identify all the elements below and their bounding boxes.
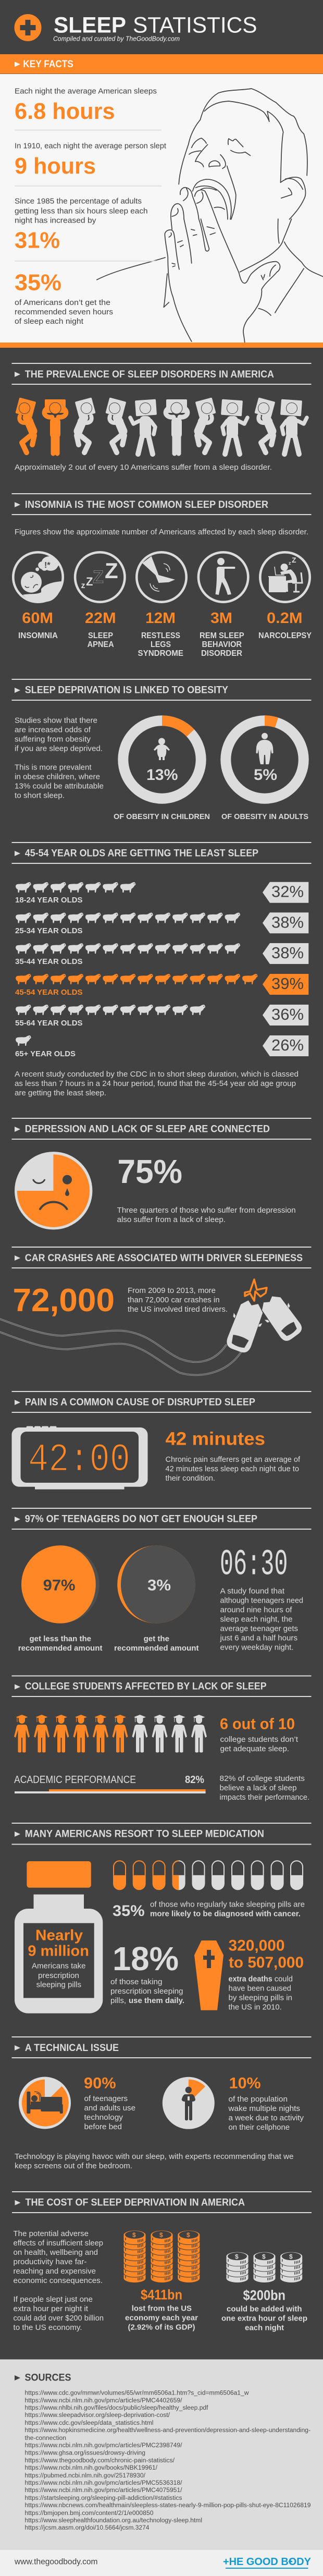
stat: restless legs bbox=[138, 610, 183, 658]
text: technology note bbox=[15, 2152, 294, 2170]
icon row: ten pills bbox=[113, 1860, 303, 1890]
stat: 31 percent bbox=[15, 197, 148, 253]
stat: average American sleep bbox=[15, 87, 157, 124]
list of source URLs bbox=[25, 2390, 310, 2531]
stat: 35 percent: recommended seven hours bbox=[15, 308, 113, 316]
stat: insomnia: INSOMNIA bbox=[18, 631, 58, 640]
icon: coffin bbox=[194, 1940, 223, 2010]
stat: 42 minutes: 42 minutes bbox=[166, 1429, 265, 1449]
row: 35-44: 38% bbox=[271, 944, 304, 962]
heading: A TECHNICAL ISSUE bbox=[25, 2043, 119, 2054]
row: 18-24 bbox=[15, 882, 308, 905]
stat: 90 percent: 90% bbox=[84, 2075, 116, 2092]
list of source URLs: https://www.ncbi.nlm.nih.gov/pmc/articles/PMC5536318/ bbox=[25, 2480, 182, 2486]
icon: pill bottle: prescription bbox=[38, 1971, 79, 1980]
row: 25-34 bbox=[15, 912, 308, 935]
heading: CAR CRASHES ARE ASSOCIATED WITH DRIVER SLEEPINESS bbox=[25, 1253, 303, 1264]
pie: 97 percent: get less than the bbox=[29, 1634, 91, 1643]
donut chart: obesity in adults bbox=[221, 721, 308, 821]
list of source URLs: https://www.ghsa.org/issues/drowsy-driving bbox=[25, 2450, 145, 2456]
row: 25-34: 38% bbox=[271, 913, 304, 931]
panel: key facts bbox=[0, 54, 323, 343]
subtitle: Compiled and curated by TheGoodBody.com bbox=[53, 34, 180, 43]
stat: 31 percent: 31% bbox=[15, 227, 60, 253]
bar chart: academic performance: 82% bbox=[185, 1774, 204, 1786]
heading bbox=[11, 1508, 312, 1530]
pie: 3 percent: recommended amount bbox=[114, 1644, 199, 1653]
list of source URLs: https://www.ncbi.nlm.nih.gov/books/NBK19961/ bbox=[25, 2465, 158, 2471]
text: teen study: every weekday night. bbox=[220, 1643, 294, 1652]
text: pain explanation: their condition. bbox=[166, 1474, 215, 1483]
panel: teenagers bbox=[11, 1508, 312, 1653]
text: 2 of 10: Approximately 2 out of every 10 Americans suffer from a sleep disorder. bbox=[15, 463, 272, 472]
panel: car crashes bbox=[0, 1247, 312, 1375]
stat: 18 percent bbox=[110, 1940, 184, 2005]
icon: orange coin stacks: $ bbox=[187, 2231, 190, 2239]
row: 35-44: 35-44 YEAR OLDS bbox=[15, 957, 82, 966]
text: teen study: although teenagers need bbox=[220, 1596, 303, 1605]
stat: sleep apnea: APNEA bbox=[88, 640, 114, 649]
stat: $411bn: $411bn bbox=[141, 2287, 182, 2303]
stat: 35 percent: 35% bbox=[15, 270, 61, 296]
text: crash explanation: From 2009 to 2013, more bbox=[128, 1286, 216, 1295]
stat: average American sleep: Each night the average American sleeps bbox=[15, 87, 157, 95]
footer bbox=[0, 2550, 323, 2576]
stat: 10 percent: 10% bbox=[229, 2075, 261, 2092]
heading bbox=[11, 1391, 312, 1413]
stat: narcolepsy bbox=[258, 610, 312, 640]
stat: 90 percent bbox=[84, 2075, 135, 2131]
text: performance note: believe a lack of sleep bbox=[220, 1784, 297, 1792]
title bbox=[54, 13, 257, 38]
stat: 18 percent: prescription sleeping bbox=[110, 1987, 183, 1996]
text: obesity explanation: to short sleep. bbox=[15, 791, 65, 800]
text: pain explanation bbox=[166, 1455, 301, 1483]
stat: $200bn: one extra hour of sleep bbox=[221, 2314, 307, 2323]
icon: sleep apnea: Z bbox=[86, 575, 93, 588]
list of source URLs: https://www.ncbi.nlm.nih.gov/pmc/articles/PMC2398749/ bbox=[25, 2443, 182, 2449]
heading: SLEEP DEPRIVATION IS LINKED TO OBESITY bbox=[25, 685, 228, 695]
text: technology note: keep screens out of the bedroom. bbox=[15, 2162, 132, 2170]
icon: grey coin stacks bbox=[226, 2252, 303, 2282]
stat: extra deaths: could bbox=[275, 1975, 293, 1984]
heading bbox=[11, 493, 312, 515]
panel: insomnia bbox=[11, 493, 312, 658]
stat: $200bn: $200bn bbox=[243, 2288, 285, 2303]
text: obesity explanation: suffering from obesity bbox=[15, 735, 91, 744]
stat: extra deaths: to 507,000 bbox=[229, 1954, 304, 1971]
stat: 18 percent: of those taking bbox=[110, 1977, 163, 1986]
heading: sources: SOURCES bbox=[25, 2373, 71, 2384]
stat: 35 percent: of sleep each night bbox=[15, 317, 84, 326]
icon: sleep apnea bbox=[75, 552, 125, 602]
text: obesity explanation: in obese children, where bbox=[15, 773, 100, 782]
stat: average American sleep: 6.8 hours bbox=[15, 99, 115, 124]
text: performance note: impacts their performance. bbox=[220, 1793, 309, 1802]
stat: sleep apnea bbox=[85, 610, 116, 649]
stat: REM sleep behavior: DISORDER bbox=[201, 649, 242, 658]
icon: sad face pie bbox=[15, 1152, 92, 1229]
text: cost explanation: productivity have far- bbox=[14, 2257, 86, 2266]
text: teen study bbox=[219, 1587, 303, 1652]
stat: 31 percent: night has increased by bbox=[15, 216, 96, 225]
heading: THE COST OF SLEEP DEPRIVATION IN AMERICA bbox=[25, 2197, 245, 2208]
icon: narcolepsy bbox=[260, 552, 310, 602]
donut chart: obesity in adults: OF OBESITY IN ADULTS bbox=[221, 812, 308, 821]
stat: 35 percent cancer bbox=[113, 1900, 305, 1920]
donut chart: obesity in children: 13% bbox=[146, 766, 178, 784]
heading bbox=[11, 842, 312, 864]
text: pain explanation: Chronic pain sufferers get an average of bbox=[166, 1455, 301, 1464]
text: adequate sleep: get adequate sleep. bbox=[220, 1744, 289, 1753]
stat: $411bn bbox=[125, 2287, 198, 2332]
icon: adult bbox=[256, 733, 273, 764]
panel: depression bbox=[11, 1118, 312, 1229]
stat: 90 percent: technology bbox=[84, 2113, 123, 2122]
list of source URLs: https://bmjopen.bmj.com/content/2/1/e000850 bbox=[25, 2510, 153, 2517]
stat: narcolepsy: 0.2M bbox=[267, 610, 302, 627]
stat: sleep apnea: 22M bbox=[85, 610, 116, 627]
text: obesity explanation: are increased odds of bbox=[15, 726, 91, 735]
list of source URLs: https://www.ncbi.nlm.nih.gov/pmc/articles/PMC4402659/ bbox=[25, 2398, 182, 2404]
heading: PAIN IS A COMMON CAUSE OF DISRUPTED SLEEP bbox=[25, 1397, 255, 1408]
pie: 3 percent: get the bbox=[144, 1634, 169, 1643]
row: 65+: 65+ YEAR OLDS bbox=[15, 1049, 76, 1058]
heading bbox=[11, 1823, 312, 1845]
heading: COLLEGE STUDENTS AFFECTED BY LACK OF SLEEP bbox=[25, 1681, 267, 1692]
heading: THE PREVALENCE OF SLEEP DISORDERS IN AMERICA bbox=[25, 369, 274, 380]
stat: extra deaths: by sleeping pills in bbox=[228, 1994, 292, 2003]
text: depression explanation bbox=[117, 1206, 296, 1224]
header bbox=[15, 13, 257, 43]
icon: pill bottle: Nearly bbox=[35, 1927, 83, 1944]
text: teen study: around nine hours of bbox=[220, 1606, 292, 1615]
row: 45-54 highlighted bbox=[15, 974, 308, 997]
icon: narcolepsy: z bbox=[289, 560, 291, 566]
list of source URLs: https://www.hopkinsmedicine.org/health/wellness-and-prevention/depression-and-sleep-understanding- bbox=[25, 2427, 310, 2434]
stat: $200bn: could be added with bbox=[227, 2305, 302, 2314]
text: cost explanation: extra hour per night it bbox=[14, 2304, 89, 2313]
logo: plus in circle bbox=[15, 14, 42, 41]
text: cost explanation: The potential adverse bbox=[14, 2229, 89, 2238]
text: pain explanation: 42 minutes less sleep each night due to bbox=[166, 1464, 299, 1473]
row: 45-54 highlighted: 45-54 YEAR OLDS bbox=[15, 988, 82, 997]
title: STATISTICS bbox=[133, 13, 257, 38]
text: CDC study: are getting the least sleep. bbox=[15, 1089, 106, 1097]
stat: narcolepsy: NARCOLEPSY bbox=[258, 631, 312, 640]
icon: orange coin stacks bbox=[123, 2230, 200, 2282]
icon: sleep apnea: z bbox=[81, 581, 85, 590]
heading: 45-54 YEAR OLDS ARE GETTING THE LEAST SLEEP bbox=[25, 848, 258, 859]
stat: 72,000: 72,000 bbox=[13, 1283, 115, 1318]
bar chart: academic performance: ACADEMIC PERFORMANCE bbox=[14, 1774, 136, 1786]
panel: sleep medication bbox=[11, 1823, 312, 2013]
text: obesity explanation bbox=[15, 716, 104, 800]
panel: sources bbox=[0, 2359, 323, 2550]
heading bbox=[11, 363, 312, 385]
row: 55-64: 36% bbox=[271, 1005, 304, 1023]
icon: REM sleep behavior bbox=[198, 552, 248, 602]
pie: 3 percent: 3% bbox=[147, 1577, 171, 1594]
pie: 97 percent: 97% bbox=[43, 1577, 76, 1594]
stat: $411bn: (2.92% of its GDP) bbox=[128, 2323, 195, 2332]
text: teen study: just 6 and a half hours bbox=[219, 1634, 297, 1643]
stat: 1910 sleep bbox=[15, 142, 167, 179]
stat: extra deaths: 320,000 bbox=[228, 1937, 284, 1955]
icon: insomnia bbox=[13, 552, 63, 602]
stat: 10 percent: of the population bbox=[228, 2095, 288, 2104]
logo: The Good Body: +HE GOOD BODY bbox=[223, 2556, 312, 2568]
stat: 18 percent: pills, bbox=[110, 1996, 126, 2005]
text: obesity explanation: if you are sleep deprived. bbox=[15, 744, 103, 753]
text: cost explanation: to the US economy. bbox=[14, 2323, 82, 2332]
stat: extra deaths: extra deaths bbox=[228, 1975, 272, 1984]
row: 65+ bbox=[15, 1035, 308, 1058]
text: CDC study bbox=[15, 1070, 299, 1097]
list of source URLs: https://www.cdc.gov/sleep/data_statistics.html bbox=[25, 2420, 153, 2426]
stat: 35 percent cancer: 35% bbox=[113, 1902, 145, 1920]
icon: orange coin stacks: $ bbox=[132, 2231, 136, 2239]
stat: 75 percent: 75% bbox=[117, 1153, 182, 1190]
heading bbox=[12, 2191, 312, 2213]
heading: MANY AMERICANS RESORT TO SLEEP MEDICATION bbox=[25, 1828, 264, 1839]
icon: yawning man line drawing bbox=[97, 89, 323, 343]
text: depression explanation: Three quarters of those who suffer from depression bbox=[117, 1206, 296, 1215]
icon row: ten students bbox=[14, 1715, 207, 1753]
icon: sleep apnea: Z bbox=[105, 558, 118, 583]
panel: cost of sleep deprivation bbox=[12, 2191, 312, 2333]
stat: $411bn: lost from the US bbox=[132, 2304, 192, 2313]
pie: 3 percent bbox=[114, 1545, 199, 1653]
text: obesity explanation: 13% could be attributable bbox=[15, 782, 104, 791]
row: 45-54 highlighted: 39% bbox=[271, 974, 304, 993]
icon: sleep apnea: Z bbox=[93, 567, 104, 587]
icon: tire tracks bbox=[0, 1319, 241, 1375]
pie: 97 percent bbox=[18, 1545, 102, 1653]
stat: REM sleep behavior bbox=[200, 610, 244, 658]
text: teen study: A study found that bbox=[220, 1587, 285, 1596]
row: 18-24: 18-24 YEAR OLDS bbox=[15, 896, 82, 905]
text: cost explanation: reaching and expensive bbox=[14, 2267, 96, 2276]
heading: key facts bbox=[0, 54, 323, 74]
list of source URLs: https://jcsm.aasm.org/doi/10.5664/jcsm.3274 bbox=[25, 2525, 150, 2531]
icon: pill bottle: Americans take bbox=[32, 1962, 85, 1971]
list of source URLs: https://www.sleepadvisor.org/sleep-deprivation-cost/ bbox=[25, 2412, 170, 2419]
heading bbox=[11, 679, 312, 701]
stat: REM sleep behavior: BEHAVIOR bbox=[202, 640, 242, 649]
icon: pill bottle: sleeping pills bbox=[36, 1981, 81, 1989]
text: technology note: Technology is playing havoc with our sleep, with experts recommending that we bbox=[15, 2152, 294, 2161]
stat: restless legs: LEGS bbox=[151, 640, 171, 649]
heading: key facts: KEY FACTS bbox=[23, 59, 73, 70]
footer URL: www.thegoodbody.com bbox=[14, 2557, 98, 2566]
text: cost explanation: effects of insufficient sleep bbox=[14, 2239, 103, 2248]
stat: restless legs: SYNDROME bbox=[138, 649, 183, 658]
stat: 31 percent: Since 1985 the percentage of adults bbox=[15, 197, 142, 206]
text: cost explanation bbox=[14, 2229, 104, 2332]
list of source URLs: https://www.thegoodbody.com/chronic-pain-statistics/ bbox=[25, 2458, 175, 2464]
stat: 35 percent cancer: of those who regularly take sleeping pills are bbox=[150, 1900, 305, 1909]
stat: $200bn bbox=[221, 2288, 307, 2333]
stat: $411bn: economy each year bbox=[125, 2314, 198, 2323]
stat: 35 percent: of Americans don’t get the bbox=[15, 298, 110, 307]
title: SLEEP bbox=[54, 13, 126, 38]
panel: college students bbox=[11, 1676, 312, 1802]
text: adequate sleep bbox=[220, 1735, 299, 1753]
icon: insomnia: !* bbox=[44, 561, 51, 570]
list of source URLs: https://www.nhlbi.nih.gov/files/docs/public/sleep/healthy_sleep.pdf bbox=[25, 2405, 208, 2411]
donut chart: obesity in children bbox=[114, 721, 210, 821]
bar chart: academic performance bbox=[14, 1774, 206, 1793]
stat: 90 percent: of teenagers bbox=[84, 2094, 128, 2103]
icon: child bbox=[154, 738, 170, 760]
panel: pain bbox=[11, 1391, 312, 1490]
stat: 1910 sleep: In 1910, each night the average person slept bbox=[15, 142, 167, 150]
stat: 10 percent bbox=[228, 2075, 304, 2132]
stat: restless legs: RESTLESS bbox=[141, 631, 180, 640]
stat: 18 percent: 18% bbox=[113, 1940, 179, 1977]
stat: 1910 sleep: 9 hours bbox=[15, 153, 96, 179]
text: crash explanation bbox=[128, 1286, 228, 1314]
row: 55-64: 55-64 YEAR OLDS bbox=[15, 1019, 82, 1028]
stat: 6 out of 10: 6 out of 10 bbox=[220, 1716, 295, 1733]
text: crash explanation: the US involved tired drivers. bbox=[128, 1305, 228, 1314]
stat: 18 percent: use them daily. bbox=[129, 1996, 184, 2005]
icon: alarm clock bbox=[11, 1426, 148, 1490]
stat: REM sleep behavior: REM SLEEP bbox=[200, 631, 244, 640]
panel: prevalence of sleep disorders bbox=[11, 363, 312, 472]
icon: narcolepsy: Z bbox=[292, 556, 296, 564]
stat: extra deaths bbox=[228, 1937, 304, 2012]
icon: crash burst bbox=[245, 1279, 267, 1301]
row: 18-24: 32% bbox=[271, 883, 304, 901]
panel: obesity bbox=[11, 679, 312, 821]
text: performance note bbox=[220, 1774, 309, 1802]
stat: REM sleep behavior: 3M bbox=[210, 610, 232, 627]
stat: 10 percent: on their cellphone bbox=[228, 2123, 290, 2132]
text: cost explanation: economic consequences. bbox=[14, 2276, 103, 2285]
donut chart: obesity in adults: 5% bbox=[254, 766, 277, 784]
list of source URLs: https://www.cdc.gov/mmwr/volumes/65/wr/mm6506a1.htm?s_cid=mm6506a1_w bbox=[25, 2390, 249, 2396]
row: 35-44 bbox=[15, 943, 308, 966]
text: obesity explanation: Studies show that there bbox=[15, 716, 97, 725]
stat: insomnia: 60M bbox=[22, 610, 53, 627]
text: obesity explanation: This is more prevalent bbox=[15, 763, 92, 772]
icon: grey coin stacks: $ bbox=[289, 2253, 293, 2260]
stat: extra deaths: have been caused bbox=[228, 1984, 291, 1993]
icon: pill bottle bbox=[15, 1861, 103, 2013]
heading: INSOMNIA IS THE MOST COMMON SLEEP DISORDER bbox=[25, 499, 268, 510]
text: CDC study: A recent study conducted by the CDC in to short sleep duration, which is classed bbox=[15, 1070, 299, 1079]
list of source URLs: https://www.ncbi.nlm.nih.gov/pmc/articles/PMC4075951/ bbox=[25, 2487, 182, 2494]
list of source URLs: https://pubmed.ncbi.nlm.nih.gov/25178930/ bbox=[25, 2473, 146, 2479]
icon: orange coin stacks: $ bbox=[159, 2231, 163, 2239]
icon: grey coin stacks: $ bbox=[262, 2253, 266, 2260]
icon: grey coin stacks: $ bbox=[235, 2253, 239, 2260]
panel: technical issue bbox=[11, 2036, 312, 2170]
heading: DEPRESSION AND LACK OF SLEEP ARE CONNECTED bbox=[25, 1124, 270, 1135]
pie: 97 percent: recommended amount bbox=[18, 1644, 102, 1653]
text: cost explanation: could add over $200 billion bbox=[14, 2314, 104, 2323]
heading bbox=[11, 1118, 312, 1140]
stat: sleep apnea: SLEEP bbox=[88, 631, 113, 640]
list of source URLs: the-connection bbox=[25, 2435, 66, 2441]
stat: 31 percent: getting less than six hours sleep each bbox=[15, 206, 148, 215]
heading bbox=[11, 1676, 312, 1697]
heading bbox=[11, 2036, 312, 2058]
stat: 35 percent cancer: more likely to be diagnosed with cancer. bbox=[150, 1910, 301, 1919]
stat: 35 percent bbox=[15, 270, 113, 326]
row: 55-64 bbox=[15, 1005, 308, 1028]
list of source URLs: https://www.nbcnews.com/healthmain/sleepless-states-nearly-9-million-pop-pills-shut-eye-8C11026819 bbox=[25, 2502, 310, 2509]
row: 25-34: 25-34 YEAR OLDS bbox=[15, 926, 82, 935]
heading bbox=[11, 1247, 312, 1268]
text: CDC study: as less than 7 hours in a 24 hour period, found that the 45-54 year old age group bbox=[15, 1079, 296, 1088]
text: cost explanation: If people slept just one bbox=[14, 2295, 93, 2304]
text: teen study: sleep each night, the bbox=[220, 1615, 293, 1624]
stat: 10 percent: wake multiple nights bbox=[228, 2104, 300, 2113]
icon: alarm clock: 42:00 bbox=[28, 1438, 130, 1483]
stat: $200bn: each night bbox=[245, 2324, 284, 2333]
text: figures note: Figures show the approximate number of Americans affected by each sleep disorder. bbox=[15, 528, 308, 536]
pie icon: technology before bed bbox=[19, 2077, 71, 2129]
icon row: ten sleeping people bbox=[15, 397, 307, 454]
text: cost explanation: on health, wellbeing and bbox=[14, 2248, 98, 2257]
list of source URLs: https://startsleeping.org/sleeping-pill-addiction/#statistics bbox=[25, 2495, 182, 2501]
row: 65+: 26% bbox=[271, 1036, 304, 1054]
stat: 90 percent: and adults use bbox=[84, 2104, 135, 2113]
text: performance note: 82% of college students bbox=[220, 1774, 305, 1783]
text: teen study: average teenager gets bbox=[220, 1625, 298, 1633]
icon: crashed car left bbox=[222, 1297, 268, 1356]
donut chart: obesity in children: OF OBESITY IN CHILDREN bbox=[114, 812, 210, 821]
list of source URLs: https://www.sleephealthfoundation.org.au/technology-sleep.html bbox=[25, 2518, 202, 2524]
stat: restless legs: 12M bbox=[145, 610, 176, 627]
stat: 10 percent: a week due to activity bbox=[228, 2114, 304, 2122]
icon: pill bottle: 9 million bbox=[28, 1943, 89, 1960]
stat: extra deaths: the US in 2010. bbox=[228, 2003, 282, 2012]
text: depression explanation: also suffer from a lack of sleep. bbox=[117, 1215, 226, 1224]
stat: 90 percent: before bed bbox=[84, 2122, 122, 2131]
panel: age groups bbox=[11, 842, 312, 1097]
icon: crashed car right bbox=[256, 1291, 307, 1345]
text: crash explanation: than 72,000 car crashes in bbox=[128, 1296, 220, 1304]
pie icon: cellphone bbox=[163, 2077, 215, 2129]
text: adequate sleep: college students don’t bbox=[220, 1735, 299, 1744]
stat: insomnia bbox=[18, 610, 58, 640]
heading: 97% OF TEENAGERS DO NOT GET ENOUGH SLEEP bbox=[25, 1514, 257, 1525]
icon: restless legs bbox=[136, 552, 187, 602]
